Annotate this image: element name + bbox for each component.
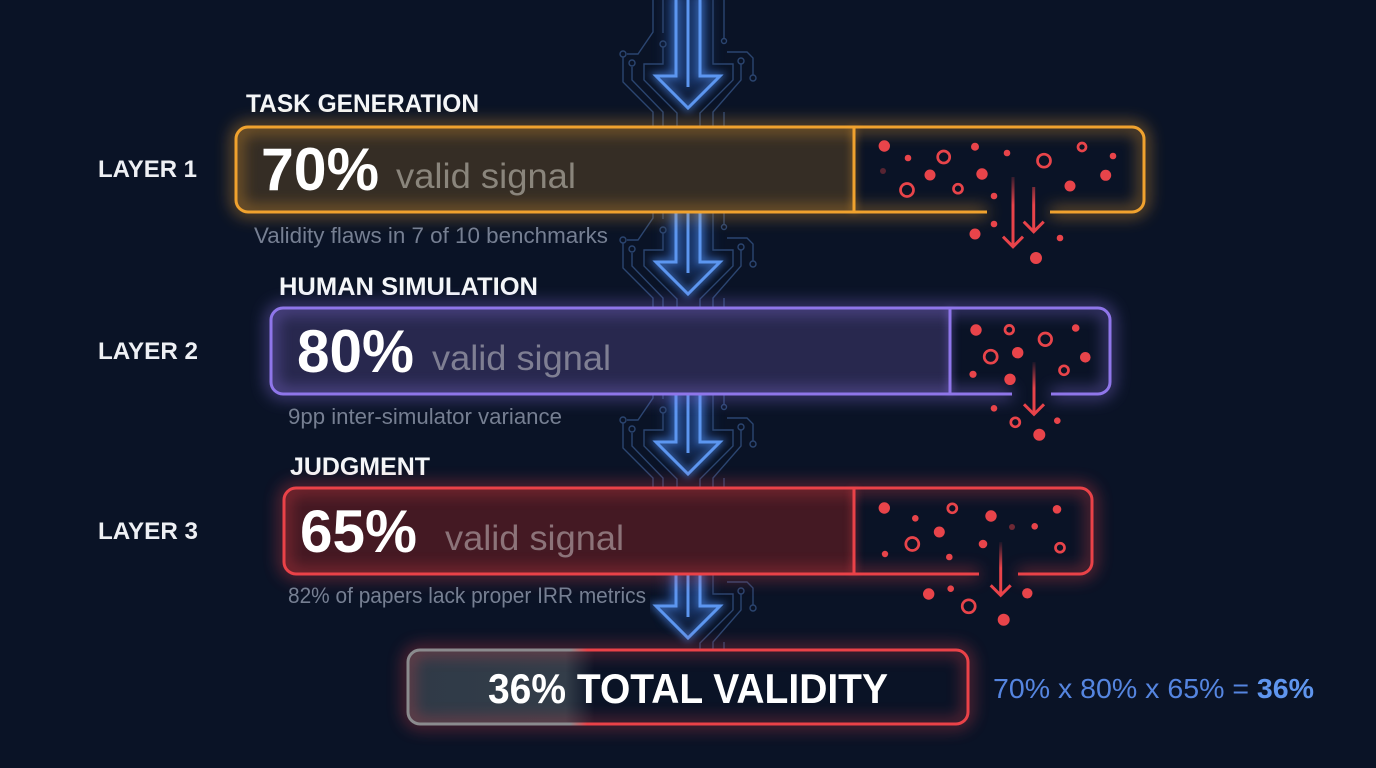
layer 3 label: LAYER 3 <box>98 518 198 545</box>
arrow 4: blue circuit arrow into total <box>650 576 757 648</box>
panel: layer 3 judgment <box>98 453 1092 626</box>
layer 3 leaking particles <box>879 502 1064 626</box>
layer 2 label: LAYER 2 <box>98 338 198 365</box>
arrow 2: blue circuit arrow into layer 2 <box>619 214 757 306</box>
layer 2 valid signal: valid signal <box>432 339 611 378</box>
layer 3 percentage: 65% <box>300 498 417 565</box>
layer 3 note: 82% of papers lack proper IRR metrics <box>288 583 646 608</box>
layer 1 heading: TASK GENERATION <box>246 90 479 118</box>
panel: total validity <box>408 650 968 724</box>
layer 2 note: 9pp inter-simulator variance <box>288 404 562 429</box>
layer 2 percentage: 80% <box>297 318 414 385</box>
layer 3 bar <box>284 488 1092 574</box>
layer 3 heading: JUDGMENT <box>290 453 430 481</box>
total bar <box>408 650 968 724</box>
formula: 70% x 80% x 65% = 36% <box>993 673 1314 704</box>
layer 2 heading: HUMAN SIMULATION <box>279 273 538 301</box>
panel: layer 1 task generation <box>98 90 1144 264</box>
arrow 3: blue circuit arrow into layer 3 <box>619 396 757 486</box>
layer 2 bar <box>271 308 1110 394</box>
layer 1 note: Validity flaws in 7 of 10 benchmarks <box>254 223 608 248</box>
layer 1 label: LAYER 1 <box>98 156 197 183</box>
layer 1 leaking particles <box>879 140 1116 264</box>
total value text: 36% TOTAL VALIDITY <box>488 665 888 712</box>
layer 1 valid signal: valid signal <box>396 157 576 196</box>
layer 1 bar <box>236 127 1144 212</box>
layer 1 percentage: 70% <box>261 136 379 203</box>
panel: layer 2 human simulation <box>98 273 1110 441</box>
layer 2 leaking particles <box>969 324 1091 441</box>
layer 3 valid signal: valid signal <box>445 519 624 558</box>
arrow 1: blue circuit arrow into layer 1 <box>620 0 756 130</box>
